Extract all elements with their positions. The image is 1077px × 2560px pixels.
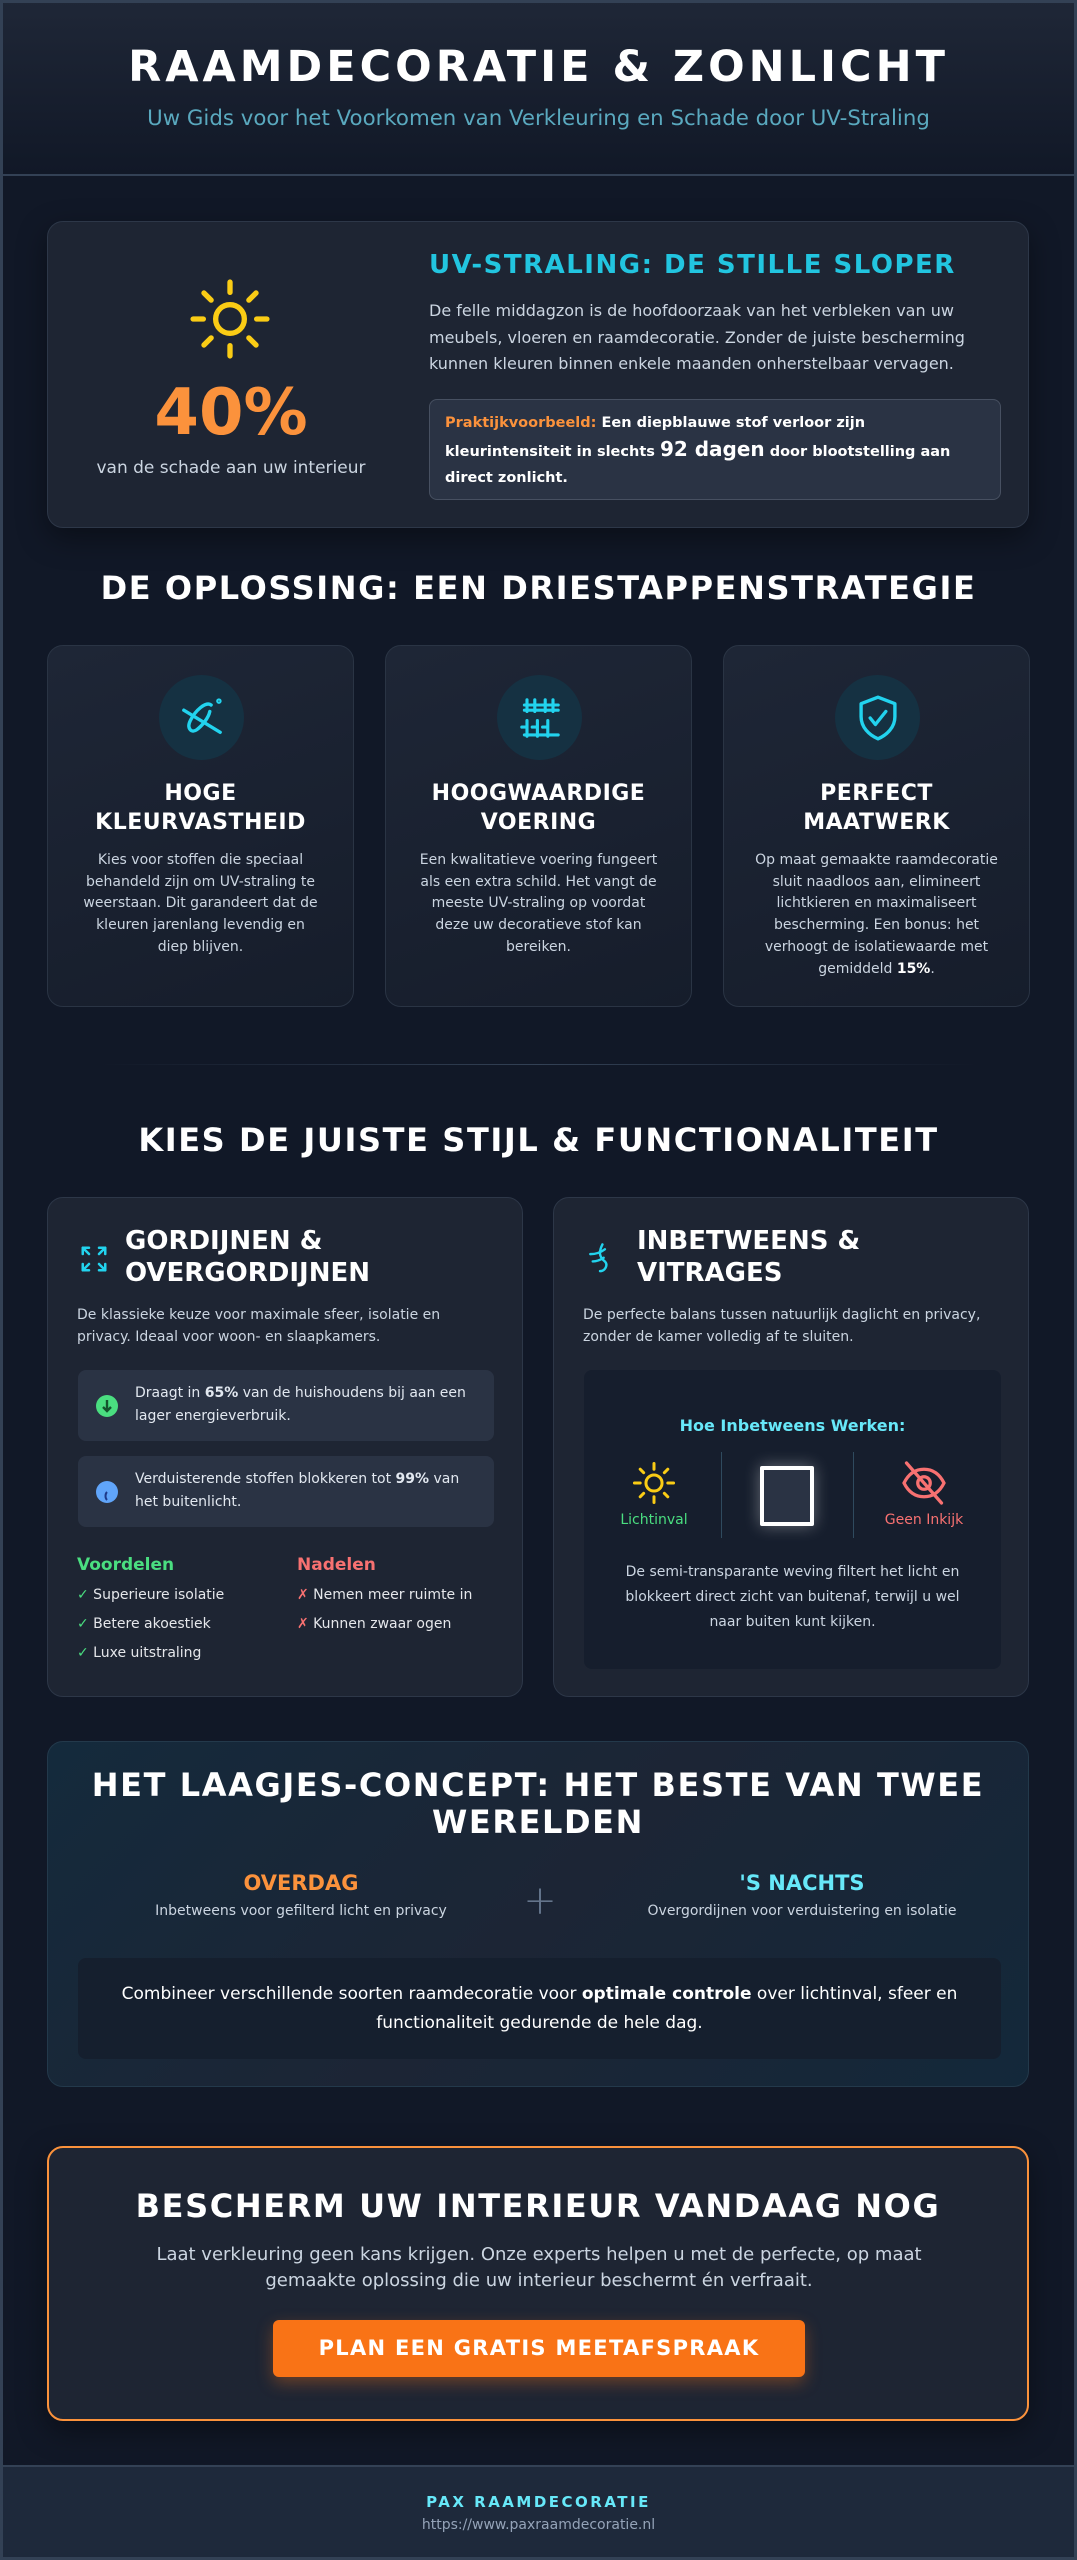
s nachts: 'S NACHTS <box>739 1871 865 1895</box>
stat: verduistering <box>78 1456 494 1527</box>
callout: Praktijkvoorbeeld: Een diepblauwe stof verloor zijn kleurintensiteit in slechts 92 dagen door blootstelling aan direct zonlicht. <box>445 415 950 486</box>
card: kleurvastheid <box>47 645 354 1007</box>
stat: energie <box>78 1370 494 1441</box>
title <box>803 781 950 835</box>
paragraph: De felle middagzon is de hoofdoorzaak van het verbleken van uw meubels, vloeren en raamdecoratie. Zonder de juiste bescherming kunnen kleuren binnen enkele maanden onherstelbaar vervagen. <box>429 301 965 373</box>
heading <box>92 1766 984 1841</box>
card: voering <box>385 645 692 1007</box>
heading: WERELDEN <box>432 1803 644 1841</box>
icon: window <box>760 1466 814 1526</box>
icon: expand <box>81 1246 107 1272</box>
header <box>0 0 1077 176</box>
overdag <box>155 1871 447 1919</box>
icon: geen inkijk <box>885 1461 964 1528</box>
description: De perfecte balans tussen natuurlijk daglicht en privacy, zonder de kamer volledig af te sluiten. <box>583 1307 980 1345</box>
summary box <box>78 1958 1001 2059</box>
icon: shield <box>835 675 920 760</box>
list: voordelen <box>77 1555 224 1661</box>
heading: BESCHERM UW INTERIEUR VANDAAG NOG <box>136 2187 940 2225</box>
list: voordelen: Voordelen <box>77 1555 174 1575</box>
list: voordelen: ✓ Superieure isolatie <box>77 1587 224 1603</box>
title: HOGE <box>164 781 237 806</box>
plus: + <box>523 1878 557 1924</box>
url: https://www.paxraamdecoratie.nl <box>422 2517 655 2533</box>
brand: PAX RAAMDECORATIE <box>426 2493 651 2511</box>
diagram caption: De semi-transparante weving filtert het licht en blokkeert direct zicht van buitenaf, terwijl u wel naar buiten kunt kijken. <box>625 1564 960 1630</box>
title: KLEURVASTHEID <box>95 810 306 835</box>
heading <box>125 1226 370 1288</box>
title <box>432 781 645 835</box>
panel: gordijnen <box>47 1197 523 1697</box>
stat: 40%: 40% <box>154 376 308 450</box>
panel: call to action <box>47 2146 1029 2421</box>
overdag: Inbetweens voor gefilterd licht en privacy <box>155 1903 447 1919</box>
icon: sun <box>190 279 270 359</box>
stat: verduistering: Verduisterende stoffen blokkeren tot 99% van het buitenlicht. <box>135 1471 459 1510</box>
title: RAAMDECORATIE & ZONLICHT <box>128 42 949 92</box>
section title: stijl: KIES DE JUISTE STIJL & FUNCTIONALITEIT <box>138 1121 939 1159</box>
button: PLAN EEN GRATIS MEETAFSPRAAK <box>319 2336 759 2360</box>
list: nadelen: Nadelen <box>297 1555 376 1575</box>
title: HOOGWAARDIGE <box>432 781 645 806</box>
title: MAATWERK <box>803 810 950 835</box>
text: Laat verkleuring geen kans krijgen. Onze experts helpen u met de perfecte, op maat gemaakte oplossing die uw interieur beschermt én verfraait. <box>156 2244 922 2291</box>
title <box>95 781 306 835</box>
overdag: OVERDAG <box>244 1871 358 1895</box>
icon: lichtinval <box>620 1462 688 1528</box>
diagram title: Hoe Inbetweens Werken: <box>680 1416 905 1435</box>
icon: wind <box>589 1243 608 1272</box>
s nachts: Overgordijnen voor verduistering en isolatie <box>648 1903 956 1919</box>
text: Op maat gemaakte raamdecoratie sluit naadloos aan, elimineert lichtkieren en maximaliseert bescherming. Een bonus: het verhoogt de isolatiewaarde met gemiddeld 15%. <box>755 852 998 977</box>
heading: OVERGORDIJNEN <box>125 1258 370 1288</box>
diagram: hoe inbetweens werken <box>584 1370 1001 1669</box>
panel: UV intro <box>47 221 1029 528</box>
title: VOERING <box>481 810 596 835</box>
list: nadelen: ✗ Kunnen zwaar ogen <box>297 1616 451 1632</box>
callout <box>429 399 1001 500</box>
icon: lichtinval: Lichtinval <box>620 1512 688 1528</box>
s nachts <box>648 1871 956 1919</box>
section title: oplossing: DE OPLOSSING: EEN DRIESTAPPENSTRATEGIE <box>101 569 976 607</box>
heading: VITRAGES <box>637 1258 783 1288</box>
icon: fabric <box>159 675 244 760</box>
panel: inbetweens <box>553 1197 1029 1697</box>
card: maatwerk <box>723 645 1030 1007</box>
text: Een kwalitatieve voering fungeert als een extra schild. Het vangt de meeste UV-straling op voordat deze uw decoratieve stof kan bereiken. <box>420 852 657 955</box>
heading <box>637 1226 860 1288</box>
description: De klassieke keuze voor maximale sfeer, isolatie en privacy. Ideaal voor woon- en slaapkamers. <box>77 1307 440 1345</box>
list: nadelen: ✗ Nemen meer ruimte in <box>297 1587 472 1603</box>
text: Kies voor stoffen die speciaal behandeld zijn om UV-straling te weerstaan. Dit garandeert dat de kleuren jarenlang levendig en diep blijven. <box>83 852 318 955</box>
stat caption: van de schade aan uw interieur <box>96 458 366 478</box>
title: PERFECT <box>820 781 933 806</box>
heading: HET LAAGJES-CONCEPT: HET BESTE VAN TWEE <box>92 1766 984 1804</box>
icon: geen inkijk: Geen Inkijk <box>885 1512 963 1528</box>
list: nadelen <box>297 1555 472 1632</box>
footer <box>0 2465 1077 2560</box>
summary box: Combineer verschillende soorten raamdecoratie voor optimale controle over lichtinval, sfeer en functionaliteit gedurende de hele dag. <box>122 1984 957 2033</box>
heading: UV-STRALING: DE STILLE SLOPER <box>429 250 956 280</box>
panel: laagjes-concept <box>47 1741 1029 2087</box>
heading: INBETWEENS & <box>637 1226 860 1256</box>
stat: energie: Draagt in 65% van de huishoudens bij aan een lager energieverbruik. <box>135 1385 466 1424</box>
subtitle: Uw Gids voor het Voorkomen van Verkleuring en Schade door UV-Straling <box>147 106 930 131</box>
list: voordelen: ✓ Luxe uitstraling <box>77 1645 201 1661</box>
heading: GORDIJNEN & <box>125 1226 322 1256</box>
button <box>273 2320 805 2377</box>
icon: layers <box>497 675 582 760</box>
list: voordelen: ✓ Betere akoestiek <box>77 1616 211 1632</box>
